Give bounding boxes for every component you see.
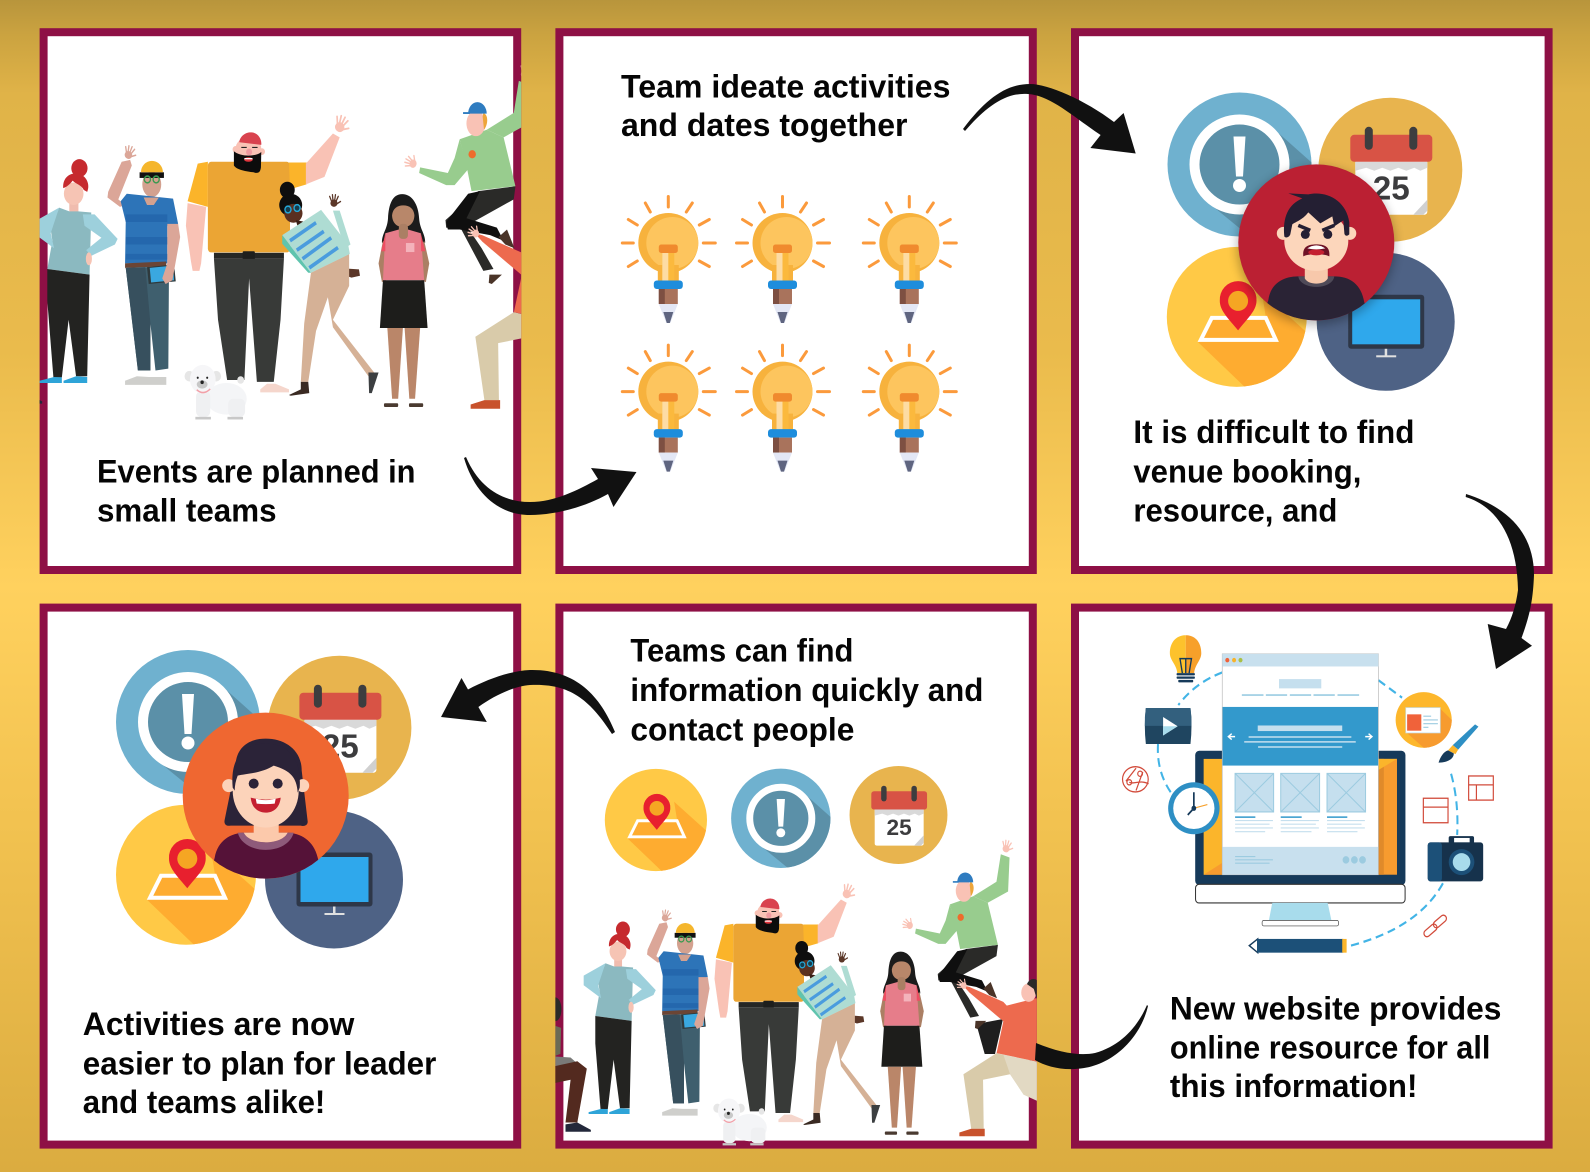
website illustration [1123,635,1493,953]
panel 4 text: easier to plan for leader [83,1046,436,1082]
panel 1 frame [44,32,517,570]
three round icons: 25 [887,815,912,840]
happy face avatar [183,713,349,891]
panel 5 frame [559,608,1033,1145]
arrow: panel 5 to panel 4 [441,670,615,734]
panel 2: ideation [559,32,1033,570]
panel 4 text: Activities are now [83,1006,354,1042]
panel 6 text: online resource for all [1170,1030,1490,1066]
panel 3 text: resource, and [1133,492,1337,528]
panel 1: small teams [40,28,522,574]
icon cluster with angry face [1167,92,1462,391]
panel 4: easier planning [44,608,517,1145]
panel 2 text: Team ideate activities [621,69,950,105]
panel 4 text: and teams alike! [83,1084,325,1120]
three round icons [605,766,947,874]
panel 3 frame [1075,32,1549,570]
panel 2 frame [559,32,1033,570]
panel 1 text: Events are planned in [97,453,416,489]
panel 2 text: and dates together [621,107,908,143]
group of people [544,840,1044,1145]
panel 3 text: It is difficult to find [1133,414,1414,450]
panel 3 text: venue booking, [1133,453,1361,489]
panel 1 text: small teams [97,492,276,528]
icon cluster with happy face [116,650,411,948]
arrow: panel 3 to panel 6 [1466,494,1534,669]
panel 3: difficulty [1075,32,1549,570]
panel 5 text: contact people [630,711,854,747]
panel 4 text [83,1006,436,1120]
arrow: panel 1 to panel 2 [464,457,636,515]
panel 4 frame [44,608,517,1145]
panel 6: new website [1075,608,1549,1145]
arrow: panel 2 to panel 3 [963,84,1136,154]
panel 6 text [1170,990,1501,1104]
dark trouser leg behind the group [976,1019,1003,1054]
panel 5 text: Teams can find [630,632,853,668]
angry face avatar [1238,164,1394,332]
panel 1 text [97,453,416,528]
panel 6 text: this information! [1170,1068,1417,1104]
lightbulb pencil icons [622,196,956,472]
icon cluster with happy face: 25 [322,727,359,764]
panel 6 frame [1075,608,1549,1145]
panel 3 text [1133,414,1414,528]
group of people [0,64,569,419]
panel 2 text [621,69,950,143]
arrow: panel 6 to panel 5 [1035,1005,1148,1069]
panel 5 text [630,632,983,747]
icon cluster with angry face: 25 [1373,170,1410,207]
panel 5: find information [544,608,1044,1145]
panel 6 text: New website provides [1170,990,1501,1026]
panel 5 text: information quickly and [630,672,983,708]
